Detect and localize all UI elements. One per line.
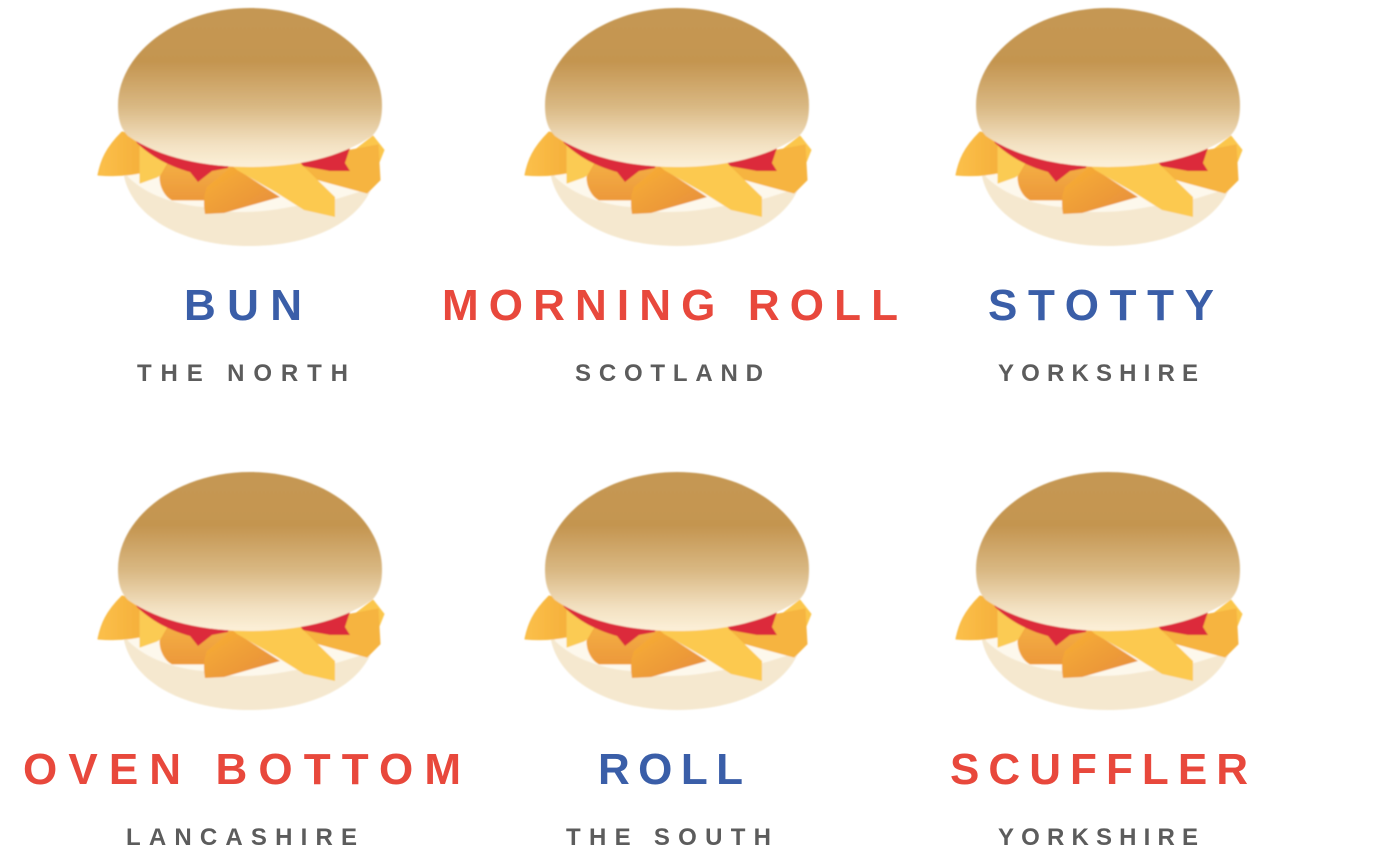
heading: Oven Bottom: OVEN BOTTOM: [23, 745, 461, 794]
heading: Scuffler: SCUFFLER: [950, 745, 1248, 794]
heading: Stotty: STOTTY: [988, 281, 1214, 330]
panel: Oven Bottom, Lancashire: [23, 472, 461, 851]
icon: chip butty burger: [956, 472, 1242, 710]
panel: Bun, The North: [98, 8, 384, 387]
panel: Scuffler, Yorkshire: [950, 472, 1248, 851]
label: Yorkshire: YORKSHIRE: [998, 824, 1198, 851]
label: Scotland: SCOTLAND: [575, 360, 763, 387]
heading: Bun: BUN: [184, 281, 302, 330]
panel: Stotty, Yorkshire: [956, 8, 1242, 387]
label: The South: THE SOUTH: [566, 824, 771, 851]
icon: chip butty burger: [525, 8, 811, 246]
heading: Morning Roll: MORNING ROLL: [442, 281, 898, 330]
heading: Roll: ROLL: [598, 745, 743, 794]
panel: Morning Roll, Scotland: [442, 8, 898, 387]
icon: chip butty burger: [98, 472, 384, 710]
icon: chip butty burger: [98, 8, 384, 246]
icon: chip butty burger: [525, 472, 811, 710]
label: Lancashire: LANCASHIRE: [126, 824, 357, 851]
label: Yorkshire: YORKSHIRE: [998, 360, 1198, 387]
icon: chip butty burger: [956, 8, 1242, 246]
panel: Roll, The South: [525, 472, 811, 851]
label: The North: THE NORTH: [137, 360, 348, 387]
